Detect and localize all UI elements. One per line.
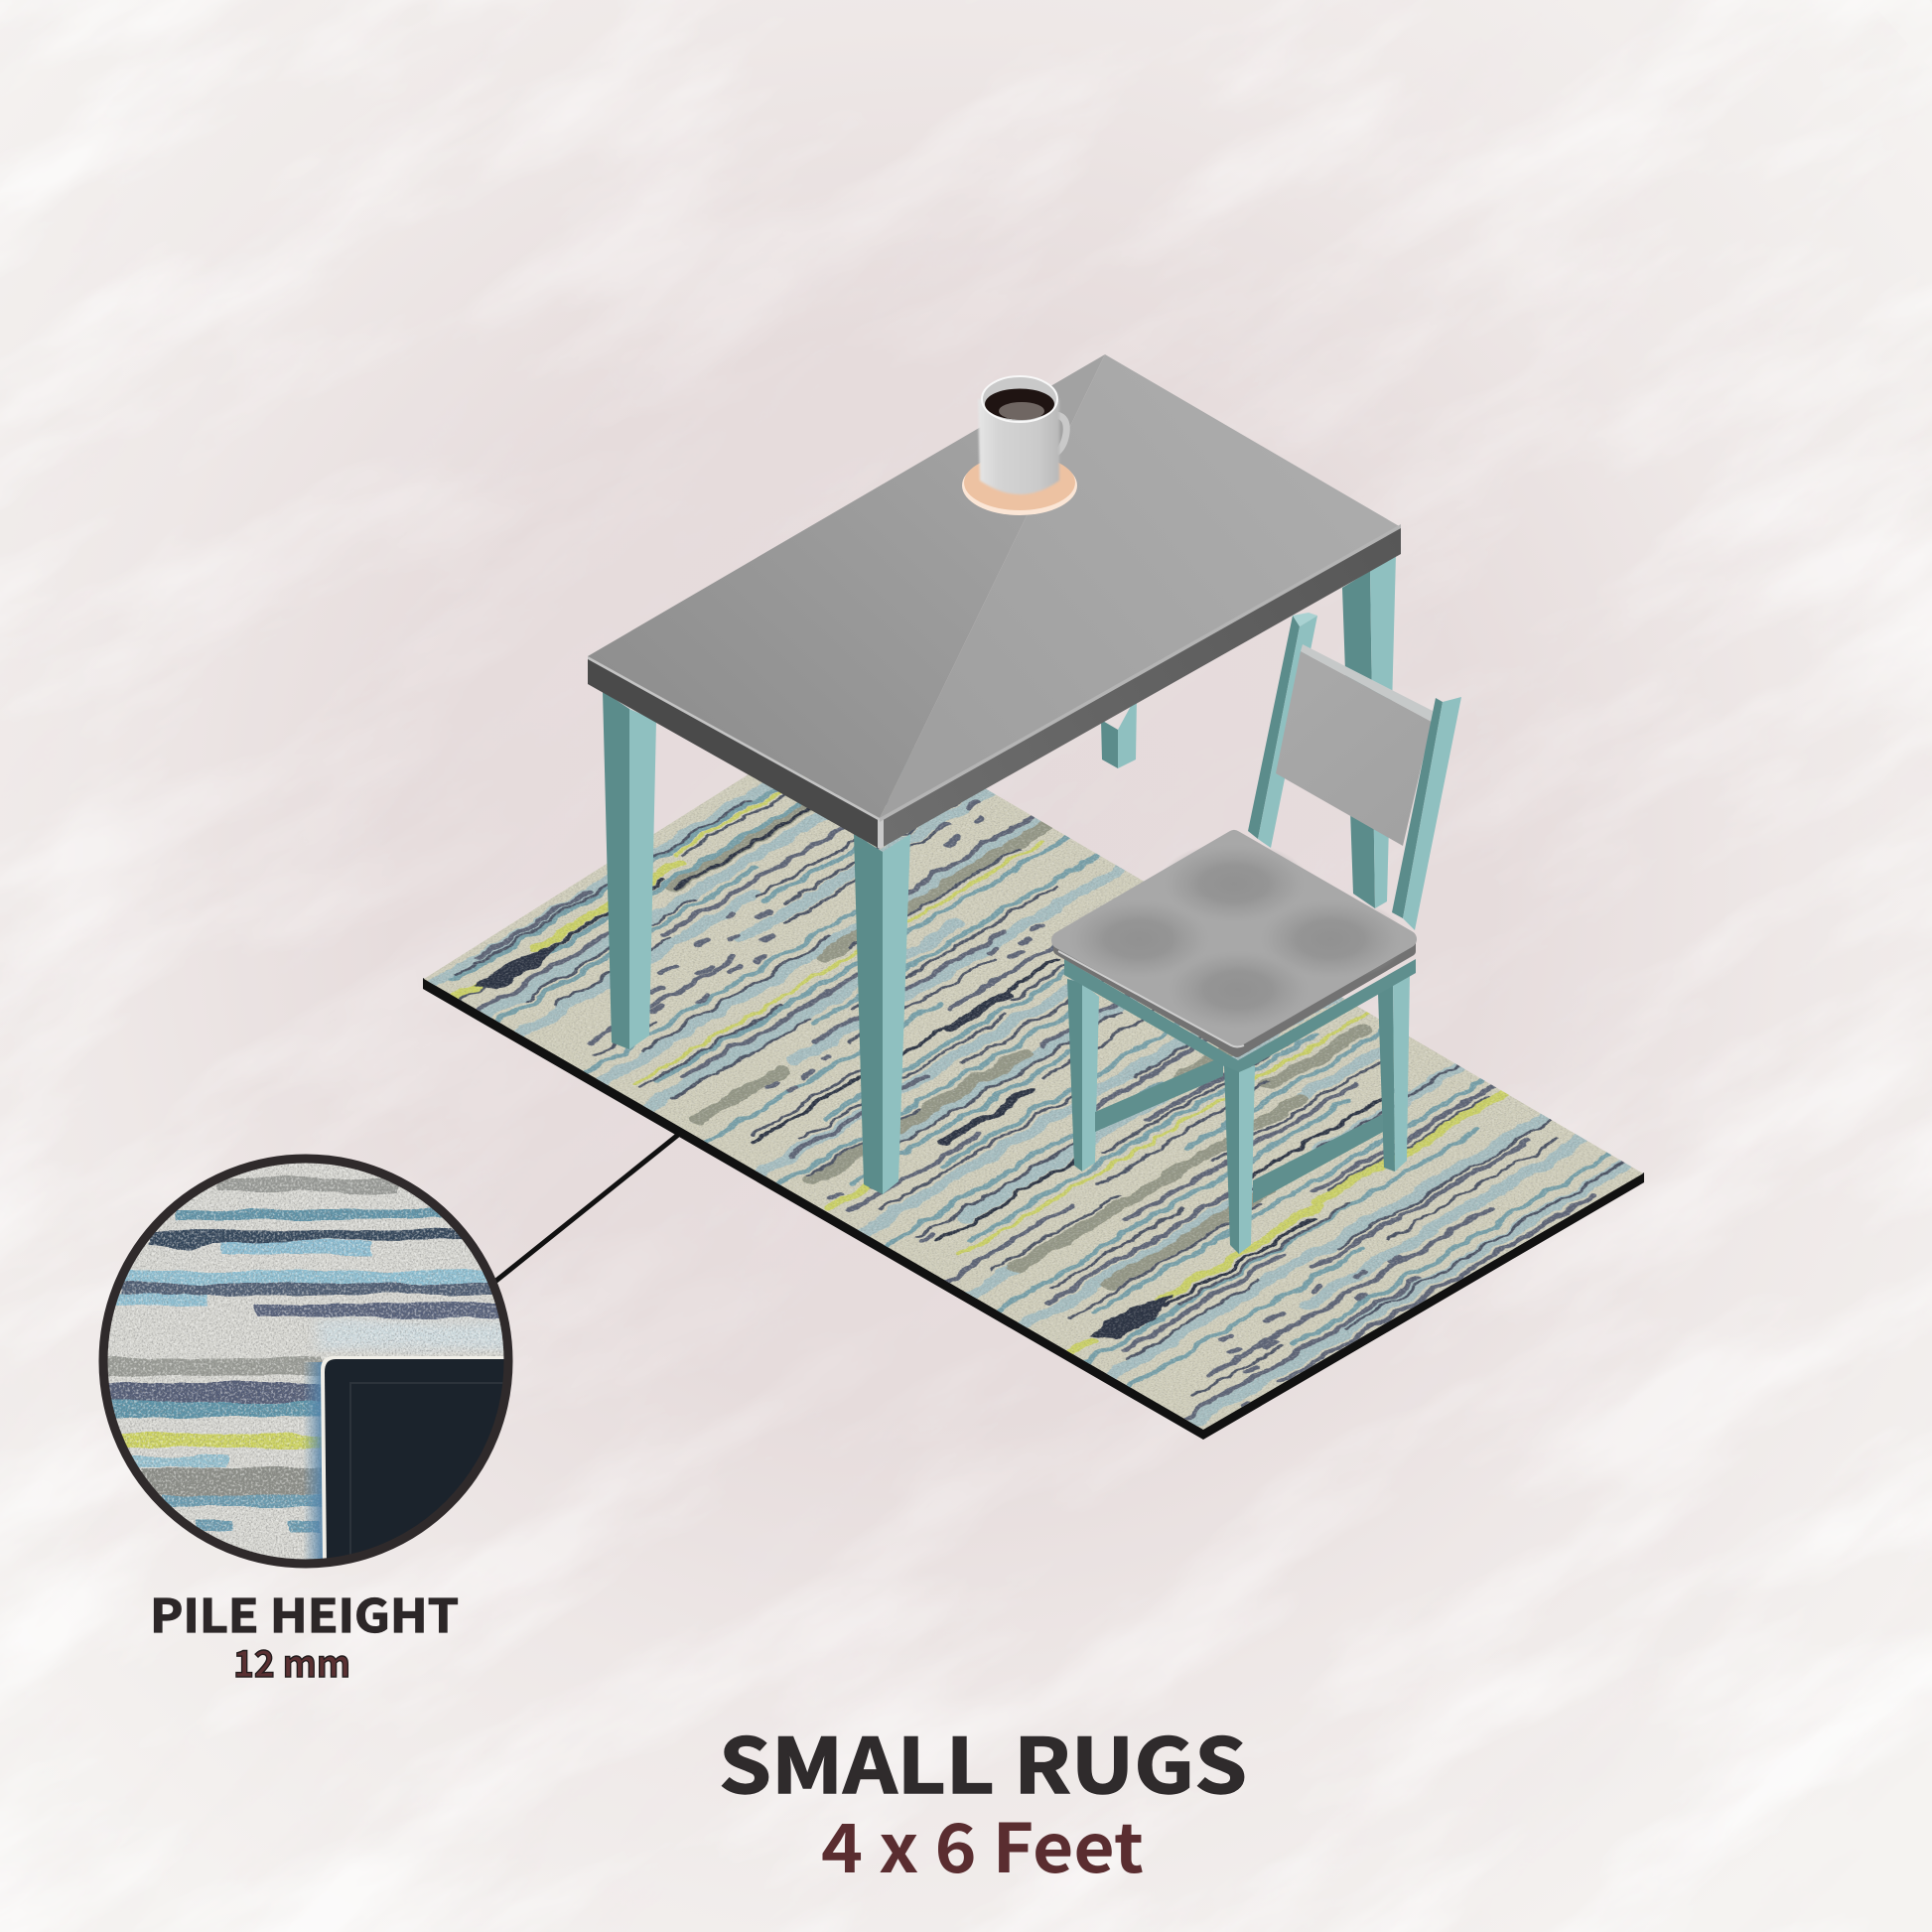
- subtitle: 4 x 6 Feet: [821, 1794, 1144, 1892]
- mug body: [978, 399, 1059, 494]
- table front leg: [854, 834, 910, 1194]
- mug handle: [1056, 415, 1066, 453]
- pile height value: 12 mm: [233, 1634, 350, 1688]
- table left side face: [588, 656, 880, 849]
- rug black edge: [423, 978, 1644, 1440]
- table right side face: [880, 527, 1401, 849]
- chair back right post: [1392, 697, 1461, 930]
- rug: 4 x 6 isometric striped rug: [423, 747, 1644, 1440]
- table back leg: [1101, 695, 1137, 768]
- chair seat: [1058, 839, 1411, 1052]
- folded rug edge shadow: [304, 1362, 323, 1559]
- rug surface pattern: [424, 747, 1643, 1430]
- detail circle: rug pile close-up: [99, 1152, 516, 1573]
- pile height label: PILE HEIGHT: [150, 1581, 459, 1646]
- coffee mug on coaster: [962, 376, 1077, 515]
- chair front leg: [1224, 1065, 1255, 1254]
- coffee: [985, 389, 1054, 420]
- title: SMALL RUGS: [719, 1706, 1247, 1815]
- table surface left half: [588, 354, 1105, 818]
- mug rim: [982, 376, 1057, 422]
- rug backing panel: [321, 1356, 511, 1569]
- connector line from rug edge to detail circle: [492, 1135, 678, 1284]
- table right leg: [1342, 554, 1396, 908]
- chair stretchers: [1095, 1056, 1383, 1203]
- seat dimples: [1063, 842, 1406, 1032]
- coaster: [962, 455, 1077, 515]
- chair backrest panel: [1276, 644, 1433, 846]
- table top: [588, 354, 1401, 849]
- pile height label: [150, 1581, 459, 1688]
- chair apron: [1064, 959, 1416, 1074]
- circle ring: [103, 1159, 508, 1564]
- chair: [1058, 613, 1461, 1254]
- table surface right half: [880, 354, 1401, 818]
- chair back left post: [1248, 613, 1317, 848]
- chair left leg: [1067, 979, 1099, 1172]
- table left leg: [603, 691, 656, 1049]
- close-up stripes: [99, 1177, 516, 1532]
- chair right leg: [1378, 972, 1410, 1172]
